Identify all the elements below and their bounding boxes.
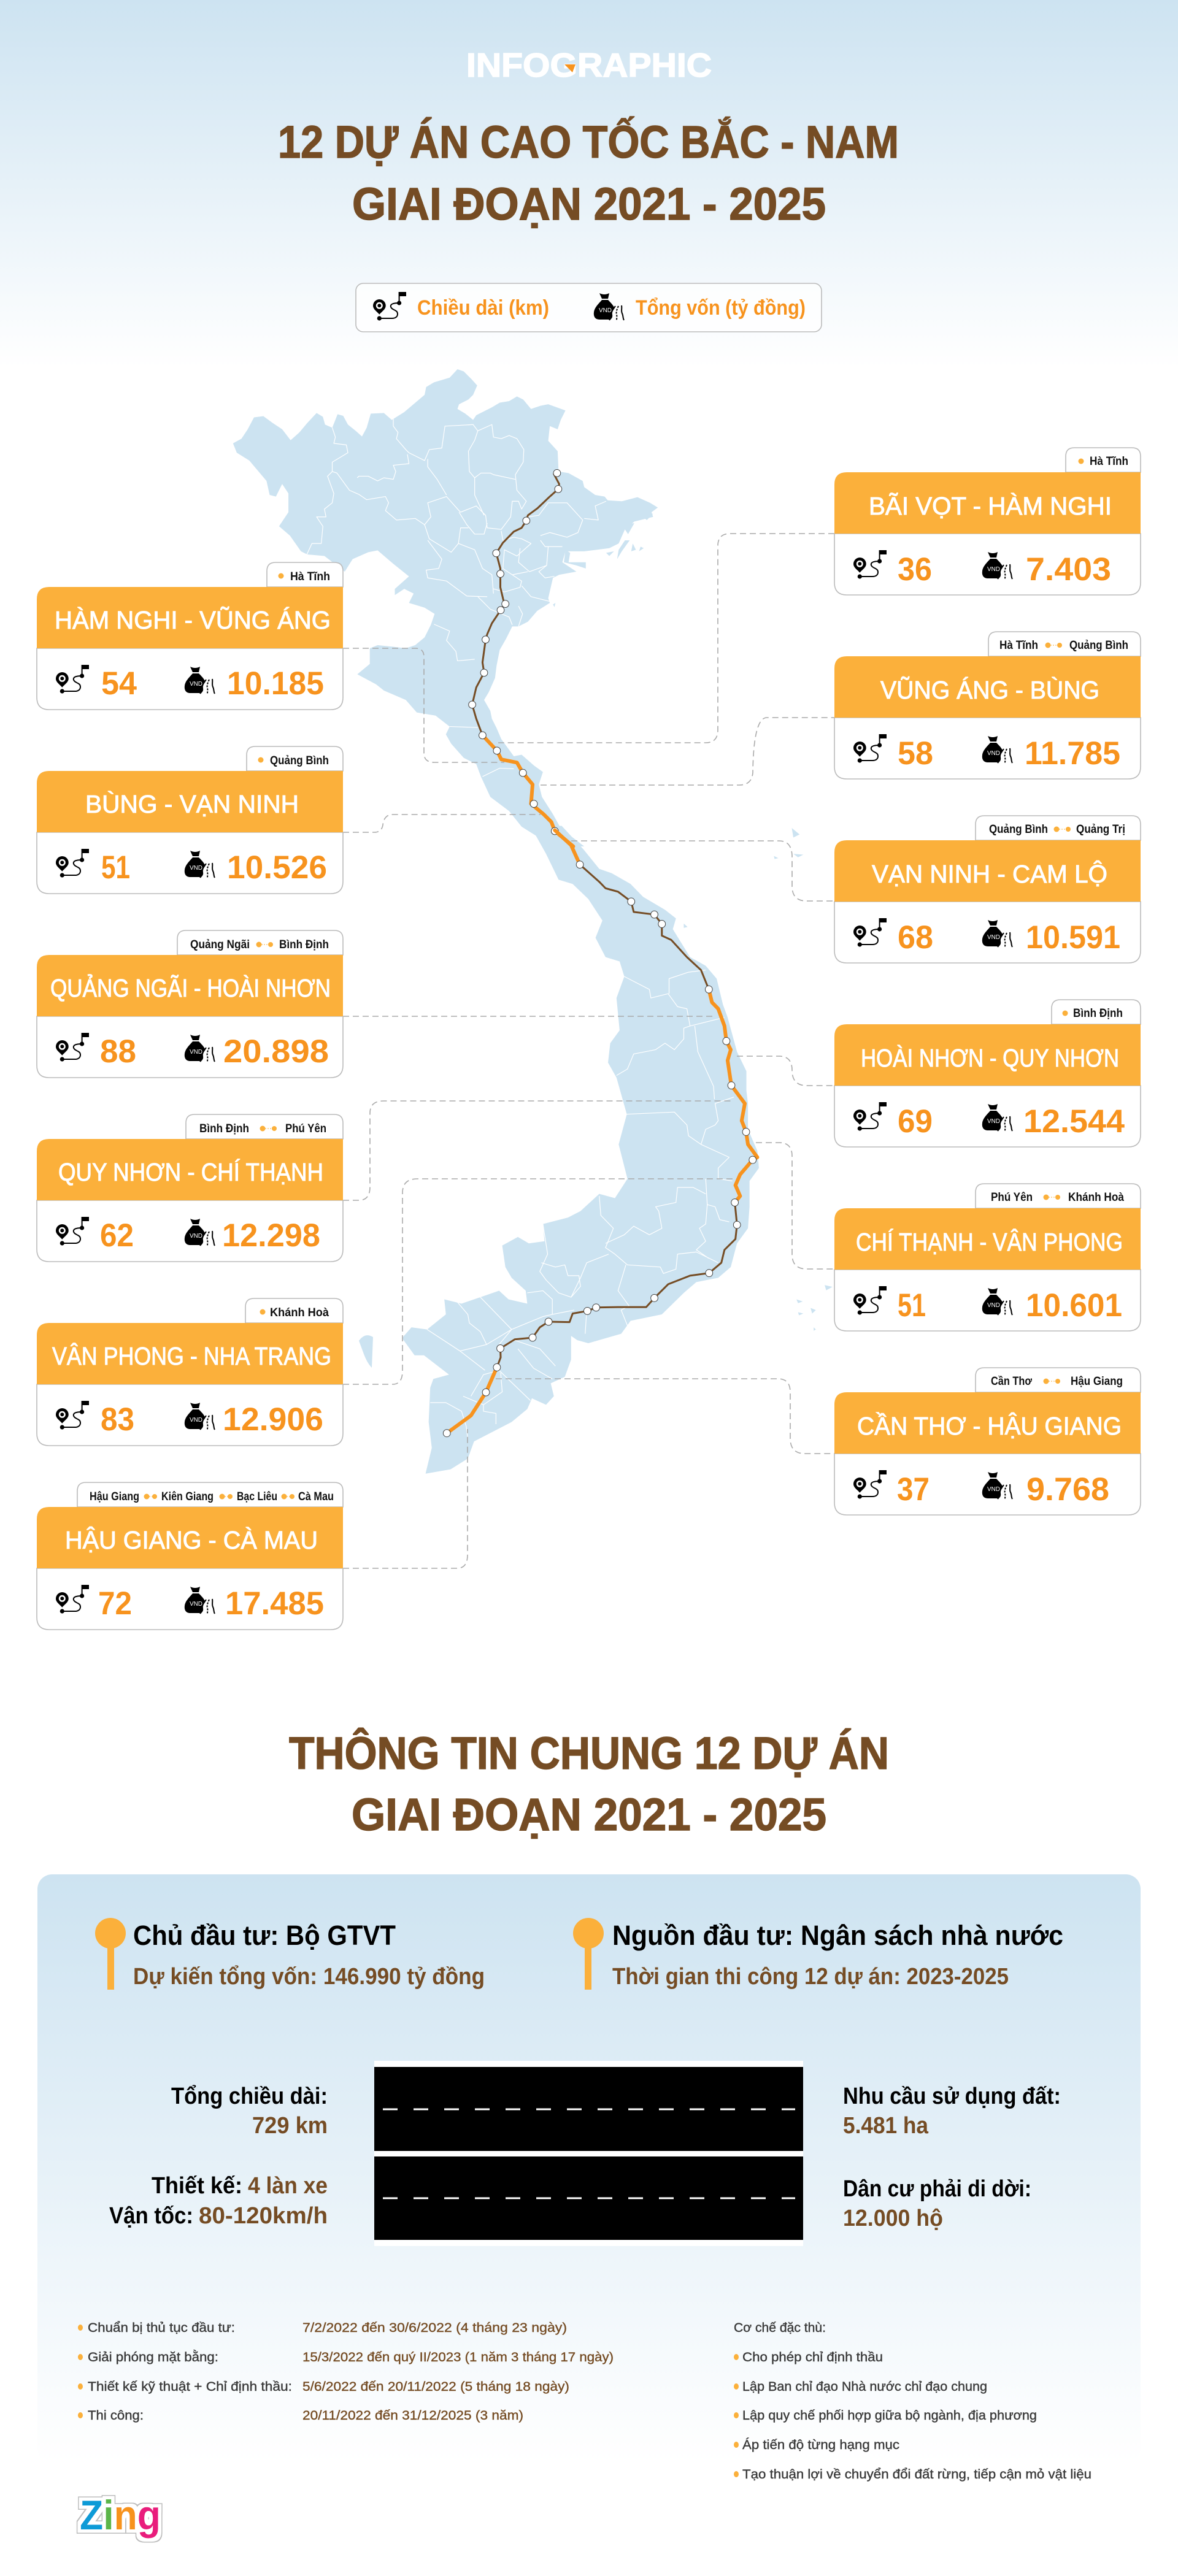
card: Chí Thạnh - Vân Phong: Phú Yên: [991, 1191, 1033, 1204]
card: Bãi Vọt - Hàm Nghi: Hà Tĩnh: [1090, 455, 1128, 468]
stat: design and speed: 4 làn xe: [248, 2173, 328, 2199]
stat: design and speed: 80-120km/h: [199, 2203, 328, 2229]
stat: design and speed: Thiết kế:: [152, 2173, 242, 2199]
card: Hàm Nghi - Vũng Áng: 10.185: [227, 665, 324, 702]
card: Cần Thơ - Hậu Giang: 9.768: [1026, 1471, 1109, 1508]
schedule list: Thi công:: [88, 2409, 144, 2423]
card: Quy Nhơn - Chí Thạnh: 12.298: [222, 1217, 320, 1254]
investor block: [95, 1918, 485, 1990]
stat: resettlement: Dân cư phải di dời:: [843, 2176, 1031, 2202]
card: Chí Thạnh - Vân Phong: [834, 1184, 1141, 1331]
panel: general information: [37, 1874, 1141, 2482]
stat: resettlement: [843, 2176, 1031, 2231]
expressway route south: [443, 830, 757, 1437]
card: Quảng Ngãi - Hoài Nhơn: QUẢNG NGÃI - HOÀI NHƠN: [50, 974, 331, 1002]
island: Phú Quốc: [359, 1335, 373, 1368]
card: Hàm Nghi - Vũng Áng: Hà Tĩnh: [290, 570, 330, 583]
logo: Zing: Zing: [80, 2492, 161, 2539]
card: Hoài Nhơn - Quy Nhơn: HOÀI NHƠN - QUY NHƠN: [861, 1044, 1119, 1072]
stat: design and speed: Vận tốc:: [109, 2203, 193, 2229]
card: Vũng Áng - Bùng: VŨNG ÁNG - BÙNG: [880, 676, 1099, 704]
stat: total length: 729 km: [252, 2113, 328, 2139]
map of Vietnam with expressway route: [233, 369, 833, 1474]
title: GIAI ĐOẠN 2021 - 2025: [352, 178, 826, 229]
card: Vân Phong - Nha Trang: VÂN PHONG - NHA TRANG: [52, 1342, 331, 1370]
southern land and provinces: [402, 826, 833, 1474]
card: Hoài Nhơn - Quy Nhơn: [834, 1000, 1141, 1147]
section heading: [289, 1728, 889, 1840]
card: Vân Phong - Nha Trang: [37, 1298, 343, 1446]
investor block: Chủ đầu tư: Bộ GTVT: [133, 1920, 396, 1951]
card: Quảng Ngãi - Hoài Nhơn: 88: [100, 1033, 136, 1070]
card: Chí Thạnh - Vân Phong: 51: [898, 1287, 926, 1324]
special mechanisms list: Cho phép chỉ định thầu: [742, 2350, 883, 2364]
card: Cần Thơ - Hậu Giang: Hậu Giang: [1071, 1375, 1123, 1388]
funding block: Nguồn đầu tư: Ngân sách nhà nước: [612, 1920, 1063, 1951]
card: Hậu Giang - Cà Mau: Hậu Giang: [90, 1490, 139, 1503]
card: Vạn Ninh - Cam Lộ: Quảng Bình: [989, 823, 1048, 836]
card: Quảng Ngãi - Hoài Nhơn: Bình Định: [279, 938, 329, 951]
card: Vũng Áng - Bùng: 11.785: [1025, 735, 1120, 772]
card: Quảng Ngãi - Hoài Nhơn: Quảng Ngãi: [190, 938, 250, 951]
special mechanisms list: Lập quy chế phối hợp giữa bộ ngành, địa phương: [742, 2409, 1037, 2423]
investor block: Dự kiến tổng vốn: 146.990 tỷ đồng: [133, 1964, 485, 1990]
legend: Chiều dài (km): [417, 296, 549, 320]
background gradient: [0, 0, 1178, 368]
schedule list: 15/3/2022 đến quý II/2023 (1 năm 3 tháng 17 ngày): [302, 2350, 614, 2364]
card: Hậu Giang - Cà Mau: 72: [98, 1585, 132, 1622]
card: Vạn Ninh - Cam Lộ: 68: [898, 919, 933, 956]
legend: [356, 283, 822, 332]
card: Quy Nhơn - Chí Thạnh: QUY NHƠN - CHÍ THẠNH: [58, 1158, 323, 1186]
title: [278, 117, 899, 229]
card: Bãi Vọt - Hàm Nghi: BÃI VỌT - HÀM NGHI: [869, 492, 1112, 520]
schedule list: 20/11/2022 đến 31/12/2025 (3 năm): [302, 2409, 523, 2423]
card: Quy Nhơn - Chí Thạnh: 62: [100, 1217, 134, 1254]
panel background: [37, 1874, 1141, 2463]
card: Bùng - Vạn Ninh: 10.526: [227, 849, 327, 886]
card: Hoài Nhơn - Quy Nhơn: Bình Định: [1073, 1007, 1123, 1020]
card: Hàm Nghi - Vũng Áng: HÀM NGHI - VŨNG ÁNG: [55, 606, 331, 634]
card: Quảng Ngãi - Hoài Nhơn: [37, 930, 343, 1078]
card: Quảng Ngãi - Hoài Nhơn: 20.898: [223, 1033, 329, 1070]
card: Hậu Giang - Cà Mau: Cà Mau: [298, 1490, 334, 1503]
card: Quy Nhơn - Chí Thạnh: [37, 1114, 343, 1262]
card: Bãi Vọt - Hàm Nghi: 7.403: [1026, 551, 1111, 588]
card: Hậu Giang - Cà Mau: Bạc Liêu: [237, 1490, 277, 1503]
card: Vũng Áng - Bùng: [834, 632, 1141, 779]
special mechanisms list: Tạo thuận lợi về chuyển đổi đất rừng, tiếp cận mỏ vật liệu: [742, 2467, 1091, 2482]
special mechanisms list: Áp tiến độ từng hạng mục: [742, 2438, 899, 2452]
card: Hậu Giang - Cà Mau: [37, 1482, 343, 1630]
stat: resettlement: 12.000 hộ: [843, 2206, 943, 2231]
card: Bãi Vọt - Hàm Nghi: 36: [898, 551, 932, 588]
card: Hậu Giang - Cà Mau: HẬU GIANG - CÀ MAU: [65, 1526, 318, 1554]
schedule list: 7/2/2022 đến 30/6/2022 (4 tháng 23 ngày): [302, 2321, 567, 2335]
schedule list: 5/6/2022 đến 20/11/2022 (5 tháng 18 ngày): [302, 2380, 569, 2394]
special mechanisms list: [734, 2321, 1091, 2482]
card: Hoài Nhơn - Quy Nhơn: 69: [898, 1103, 933, 1140]
card: Chí Thạnh - Vân Phong: 10.601: [1026, 1287, 1122, 1324]
card: Hàm Nghi - Vũng Áng: [37, 562, 343, 710]
schedule list: [78, 2321, 614, 2423]
title: 12 DỰ ÁN CAO TỐC BẮC - NAM: [278, 117, 899, 167]
dashed connector lines: [343, 534, 834, 1568]
schedule list: Thiết kế kỹ thuật + Chỉ định thầu:: [88, 2380, 292, 2394]
card: Hậu Giang - Cà Mau: 17.485: [225, 1585, 324, 1622]
card: Hàm Nghi - Vũng Áng: 54: [101, 665, 137, 702]
card: Vân Phong - Nha Trang: Khánh Hoà: [270, 1306, 329, 1319]
card: Vũng Áng - Bùng: 58: [898, 735, 933, 772]
funding block: Thời gian thi công 12 dự án: 2023-2025: [612, 1964, 1009, 1990]
card: Vân Phong - Nha Trang: 83: [101, 1401, 134, 1438]
section heading: THÔNG TIN CHUNG 12 DỰ ÁN: [289, 1728, 889, 1779]
card: Chí Thạnh - Vân Phong: Khánh Hoà: [1068, 1191, 1124, 1204]
card: Cần Thơ - Hậu Giang: 37: [897, 1471, 930, 1508]
section heading: GIAI ĐOẠN 2021 - 2025: [352, 1789, 826, 1840]
stat: total length: [171, 2083, 328, 2139]
card: Cần Thơ - Hậu Giang: CẦN THƠ - HẬU GIANG: [857, 1412, 1122, 1440]
legend: Tổng vốn (tỷ đồng): [636, 296, 806, 320]
northern land and provinces: [233, 369, 658, 846]
card: Vạn Ninh - Cam Lộ: Quảng Trị: [1076, 823, 1125, 836]
schedule list: Giải phóng mặt bằng:: [88, 2350, 218, 2364]
card: Hậu Giang - Cà Mau: Kiên Giang: [161, 1490, 214, 1503]
card: Vạn Ninh - Cam Lộ: 10.591: [1026, 919, 1120, 956]
card: Vũng Áng - Bùng: Quảng Bình: [1069, 639, 1128, 652]
card: Quy Nhơn - Chí Thạnh: Bình Định: [199, 1122, 249, 1135]
funding block: [573, 1918, 1063, 1990]
card: Bùng - Vạn Ninh: BÙNG - VẠN NINH: [85, 790, 299, 818]
card: Vũng Áng - Bùng: Hà Tĩnh: [999, 639, 1038, 652]
kicker: INFOGRAPHIC: INFOGRAPHIC: [466, 46, 712, 84]
stat: land demand: Nhu cầu sử dụng đất:: [843, 2083, 1061, 2109]
card: Cần Thơ - Hậu Giang: [834, 1368, 1141, 1515]
special mechanisms list: Lập Ban chỉ đạo Nhà nước chỉ đạo chung: [742, 2380, 987, 2394]
road graphic: [374, 2061, 803, 2246]
card: Bãi Vọt - Hàm Nghi: [834, 448, 1141, 595]
card: Bùng - Vạn Ninh: [37, 746, 343, 894]
card: Cần Thơ - Hậu Giang: Cần Thơ: [991, 1375, 1032, 1388]
card: Vạn Ninh - Cam Lộ: [834, 816, 1141, 963]
stat: land demand: 5.481 ha: [843, 2113, 929, 2139]
card: Quy Nhơn - Chí Thạnh: Phú Yên: [285, 1122, 326, 1135]
card: Bùng - Vạn Ninh: Quảng Bình: [270, 754, 329, 767]
card: Vân Phong - Nha Trang: 12.906: [223, 1401, 323, 1438]
schedule list: Chuẩn bị thủ tục đầu tư:: [88, 2321, 235, 2335]
card: Chí Thạnh - Vân Phong: CHÍ THẠNH - VÂN PHONG: [856, 1228, 1123, 1256]
special mechanisms list: Cơ chế đặc thù:: [734, 2321, 826, 2335]
stat: total length: Tổng chiều dài:: [171, 2083, 328, 2109]
stat: land demand: [843, 2083, 1061, 2139]
card: Hoài Nhơn - Quy Nhơn: 12.544: [1023, 1103, 1125, 1140]
card: Bùng - Vạn Ninh: 51: [101, 849, 130, 886]
card: Vạn Ninh - Cam Lộ: VẠN NINH - CAM LỘ: [872, 860, 1107, 888]
stat: design and speed: [109, 2173, 328, 2229]
expressway route north: [469, 469, 573, 846]
